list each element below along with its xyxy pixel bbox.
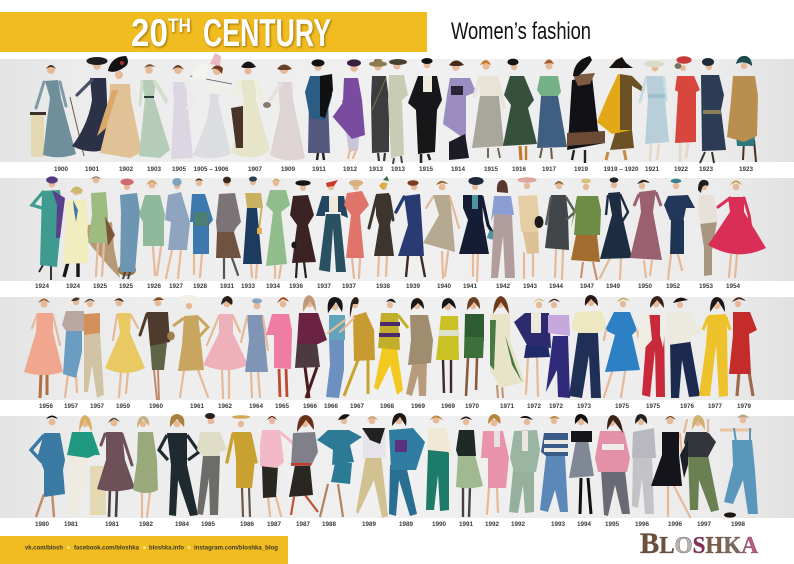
figure 1960 <box>140 297 175 400</box>
figure 1901 <box>70 57 108 156</box>
title: 20th century: CENTURY <box>203 12 331 55</box>
year labels row 3: 1965 <box>275 403 289 410</box>
year labels row 4: 1985 <box>201 521 215 528</box>
year labels row 2: 1928 <box>193 283 207 290</box>
figure 1913 light suit <box>388 59 408 164</box>
year labels row 4: 1996 <box>668 521 682 528</box>
year labels row 1: 1913 <box>391 166 405 173</box>
year labels row 4: 1992 <box>485 521 499 528</box>
year labels row 1: 1907 <box>248 166 262 173</box>
figure 1986 <box>227 415 256 517</box>
year labels row 4: 1997 <box>697 521 711 528</box>
figure 1916 <box>503 59 537 160</box>
figure 1933 <box>243 176 263 278</box>
figure 1938 <box>369 176 394 276</box>
year labels row 2: 1925 <box>93 283 107 290</box>
year labels row 4: 1987 <box>296 521 310 528</box>
figure 1957 beige <box>84 299 104 398</box>
figure 1971 <box>490 296 525 398</box>
year labels row 1: 1909 <box>281 166 295 173</box>
figure 1996 black <box>651 416 690 517</box>
figure 1970 <box>464 297 484 396</box>
figure 1942 <box>491 180 515 278</box>
figure 1953 <box>698 180 718 276</box>
panel: row 4 <box>0 413 794 528</box>
footer bar with links: instagram.com/bloshka_blog <box>194 544 278 552</box>
year labels row 3 <box>39 403 751 410</box>
figure 1925 blue <box>118 179 140 279</box>
figure 1937 trousers <box>316 180 348 272</box>
year labels row 3: 1973 <box>577 403 591 410</box>
year labels row 3: 1979 <box>737 403 751 410</box>
figure 1997 <box>680 415 719 512</box>
year labels row 1: 1903 <box>147 166 161 173</box>
figure 1915 <box>408 58 442 163</box>
year labels row 2: 1943 <box>523 283 537 290</box>
figure 1975 red <box>637 296 667 397</box>
figure 1989 teal <box>389 413 425 516</box>
title: 20th century: TH <box>168 16 191 37</box>
year labels row 1: 1905 – 1906 <box>193 166 229 173</box>
year labels row 4: 1981 <box>105 521 119 528</box>
figure 1962 <box>203 296 248 398</box>
figure 1940 <box>423 181 459 278</box>
figure 1923 coat <box>727 56 758 162</box>
year labels row 3: 1959 <box>116 403 130 410</box>
figure 1905 <box>168 65 194 159</box>
year labels row 1: 1911 <box>312 166 326 173</box>
year labels row 2: 1924 <box>35 283 49 290</box>
year labels row 3: 1975 <box>615 403 629 410</box>
year labels row 1: 1917 <box>542 166 556 173</box>
year labels row 4: 1992 <box>511 521 525 528</box>
figure 1972 purple <box>546 299 570 398</box>
title: 20th century <box>131 12 331 55</box>
year labels row 2: 1947 <box>580 283 594 290</box>
pedestal <box>30 112 46 157</box>
figure 1975 blue <box>604 298 640 397</box>
year labels row 1: 1900 <box>54 166 68 173</box>
figure 1980 <box>31 416 65 517</box>
figure 1917 <box>537 60 567 159</box>
figure 1967 <box>340 297 375 396</box>
figure 1905-1906 <box>190 53 232 158</box>
figure 1950 <box>630 180 662 277</box>
figure 1961 <box>173 295 208 397</box>
year labels row 2: 1949 <box>606 283 620 290</box>
figure 1924 cream <box>63 186 88 277</box>
figure 1959 <box>105 298 145 397</box>
figure 1981 floral <box>97 418 135 517</box>
year labels row 2: 1952 <box>666 283 680 290</box>
figure 1964 <box>241 298 268 397</box>
figure 1969 coat <box>406 298 433 396</box>
figure 1993 <box>540 416 568 512</box>
year labels row 3: 1975 <box>646 403 660 410</box>
panel: row 3 <box>0 295 794 410</box>
figure 1939 <box>396 180 425 277</box>
figure 1909 <box>263 64 305 160</box>
year labels row 3: 1966 <box>303 403 317 410</box>
year labels row 3: 1957 <box>90 403 104 410</box>
year labels row 1: 1912 <box>343 166 357 173</box>
year labels row 2: 1954 <box>726 283 740 290</box>
year labels row 1: 1916 <box>512 166 526 173</box>
figure 1988 <box>317 414 362 517</box>
year labels row 1: 1901 <box>85 166 99 173</box>
figure 1923 navy <box>700 58 726 163</box>
year labels row 3: 1961 <box>190 403 204 410</box>
figure 1981 white <box>67 415 100 516</box>
figure 1937 floral <box>344 180 369 278</box>
figure 1973 <box>569 295 607 398</box>
year labels row 1: 1923 <box>739 166 753 173</box>
figure 1977 <box>699 297 730 397</box>
year labels row 3: 1962 <box>218 403 232 410</box>
footer bar with links <box>0 536 288 564</box>
year labels row 2: 1927 <box>169 283 183 290</box>
figure 1968 <box>374 299 408 395</box>
year labels row 3: 1972 <box>549 403 563 410</box>
figure 1931 <box>216 177 241 278</box>
title bar <box>0 12 427 55</box>
year labels row 3: 1957 <box>64 403 78 410</box>
figure 1915 grey skirt <box>472 60 504 158</box>
year labels row 2: 1950 <box>638 283 652 290</box>
year labels row 4: 1996 <box>635 521 649 528</box>
year labels row 2: 1934 <box>266 283 280 290</box>
year labels row 2: 1953 <box>699 283 713 290</box>
year labels row 2: 1936 <box>289 283 303 290</box>
year labels row 1: 1922 <box>674 166 688 173</box>
figure 1941 <box>459 177 495 281</box>
figure 1907 <box>231 62 270 158</box>
year labels row 4: 1989 <box>399 521 413 528</box>
figure 1927 <box>165 178 190 278</box>
figure 1954 <box>708 180 766 277</box>
year labels row 1: 1915 <box>419 166 433 173</box>
year labels row 2: 1942 <box>496 283 510 290</box>
year labels row 1: 1915 <box>484 166 498 173</box>
figure 1985 <box>197 413 227 515</box>
year labels row 2: 1925 <box>119 283 133 290</box>
year labels row 1: 1921 <box>645 166 659 173</box>
figure 1979 <box>729 297 757 396</box>
year labels row 3: 1976 <box>680 403 694 410</box>
figure 1991 <box>456 416 483 517</box>
year labels row 1: 1902 <box>119 166 133 173</box>
year labels row 3: 1969 <box>441 403 455 410</box>
figure 1949 <box>600 177 632 279</box>
logo: BLOSHKA <box>640 527 759 560</box>
figure 1992 pink <box>481 414 509 514</box>
year labels row 3: 1969 <box>411 403 425 410</box>
panel: row 2 <box>0 176 794 290</box>
subtitle: Women’s fashion <box>451 18 591 45</box>
figure 1976 <box>666 298 702 398</box>
year labels row 4: 1988 <box>322 521 336 528</box>
figure 1919 <box>567 56 605 163</box>
year labels row 3: 1971 <box>500 403 514 410</box>
figure 1994 <box>569 414 594 514</box>
year labels row 4: 1995 <box>605 521 619 528</box>
year labels row 1: 1919 – 1920 <box>603 166 639 173</box>
figure 1982 <box>133 416 158 517</box>
year labels row 2: 1939 <box>406 283 420 290</box>
figure 1969 yellow <box>436 298 459 393</box>
figure 1911 <box>305 59 333 160</box>
figure 1972 navy <box>514 298 551 396</box>
year labels row 4: 1998 <box>731 521 745 528</box>
figure 1914 <box>443 60 476 160</box>
figure 1900 <box>36 65 76 157</box>
figure 1989 beige <box>356 416 388 518</box>
figure 1998 <box>720 414 758 518</box>
figure 1995 <box>595 415 630 516</box>
figure 1987 grey <box>289 415 318 515</box>
title: 20th century: 20 <box>131 12 168 55</box>
year labels row 1 <box>54 166 753 173</box>
figure 1934 <box>266 178 290 278</box>
figure 1902 <box>97 56 142 158</box>
figure 1924 teal <box>32 176 65 280</box>
figure 1922 <box>675 56 700 162</box>
year labels row 3: 1956 <box>39 403 53 410</box>
figure 1928 <box>190 178 213 277</box>
pedestal <box>90 466 106 515</box>
year labels row 2: 1941 <box>463 283 477 290</box>
figure 1984 <box>159 414 199 516</box>
year labels row 3: 1972 <box>527 403 541 410</box>
year labels row 2: 1944 <box>549 283 563 290</box>
year labels row 2: 1937 <box>342 283 356 290</box>
year labels row 3: 1966 <box>324 403 338 410</box>
year labels row 4: 1987 <box>267 521 281 528</box>
footer bar with links: bloshka.info <box>149 544 184 552</box>
figure 1956 <box>24 298 63 398</box>
figure 1913 <box>369 59 389 161</box>
figure 1912 <box>332 59 365 158</box>
figure 1987 pink <box>260 416 295 516</box>
figure 1943 <box>518 177 544 278</box>
figure 1990 <box>426 416 453 511</box>
year labels row 4: 1989 <box>362 521 376 528</box>
year labels row 2: 1937 <box>317 283 331 290</box>
year labels row 2: 1924 <box>66 283 80 290</box>
figure 1925 green <box>88 176 120 278</box>
figure 1903 <box>139 64 170 158</box>
year labels row 4: 1984 <box>175 521 189 528</box>
figure 1936 <box>290 180 316 278</box>
figure 1965 <box>266 297 292 397</box>
footer bar with links: facebook.com/bloshka <box>74 544 139 552</box>
year labels row 4: 1981 <box>64 521 78 528</box>
year labels row 2: 1926 <box>147 283 161 290</box>
year labels row 2: 1933 <box>241 283 255 290</box>
figure 1947 <box>571 179 601 280</box>
year labels row 3: 1968 <box>380 403 394 410</box>
year labels row 2: 1931 <box>220 283 234 290</box>
year labels row 4: 1986 <box>240 521 254 528</box>
year labels row 4: 1990 <box>432 521 446 528</box>
year labels row 2 <box>35 283 740 290</box>
year labels row 4: 1980 <box>35 521 49 528</box>
year labels row 4: 1982 <box>139 521 153 528</box>
year labels row 3: 1967 <box>350 403 364 410</box>
figure 1926 <box>139 180 165 275</box>
year labels row 3: 1970 <box>465 403 479 410</box>
year labels row 1: 1914 <box>451 166 465 173</box>
year labels row 1: 1919 <box>574 166 588 173</box>
figure 1957 stripes <box>62 297 84 397</box>
year labels row 1: 1913 <box>369 166 383 173</box>
figure 1966 maroon <box>295 295 327 398</box>
footer bar with links: vk.com/blosh <box>25 544 63 552</box>
year labels row 4 <box>35 521 745 528</box>
panel: row 1 <box>0 53 794 173</box>
figure 1921 <box>640 61 669 161</box>
year labels row 1: 1923 <box>699 166 713 173</box>
year labels row 4: 1993 <box>551 521 565 528</box>
year labels row 2: 1938 <box>376 283 390 290</box>
year labels row 1: 1905 <box>172 166 186 173</box>
figure 1919-1920 <box>597 57 645 160</box>
year labels row 2: 1940 <box>437 283 451 290</box>
figure 1966 jeans <box>326 297 345 398</box>
figure 1952 <box>664 179 695 279</box>
figure 1944 <box>545 181 575 279</box>
year labels row 3: 1977 <box>708 403 722 410</box>
year labels row 3: 1964 <box>249 403 263 410</box>
year labels row 3: 1960 <box>149 403 163 410</box>
figure 1992 sage <box>509 416 540 513</box>
year labels row 4: 1991 <box>459 521 473 528</box>
year labels row 4: 1994 <box>577 521 591 528</box>
figure 1996 grey <box>632 414 656 514</box>
